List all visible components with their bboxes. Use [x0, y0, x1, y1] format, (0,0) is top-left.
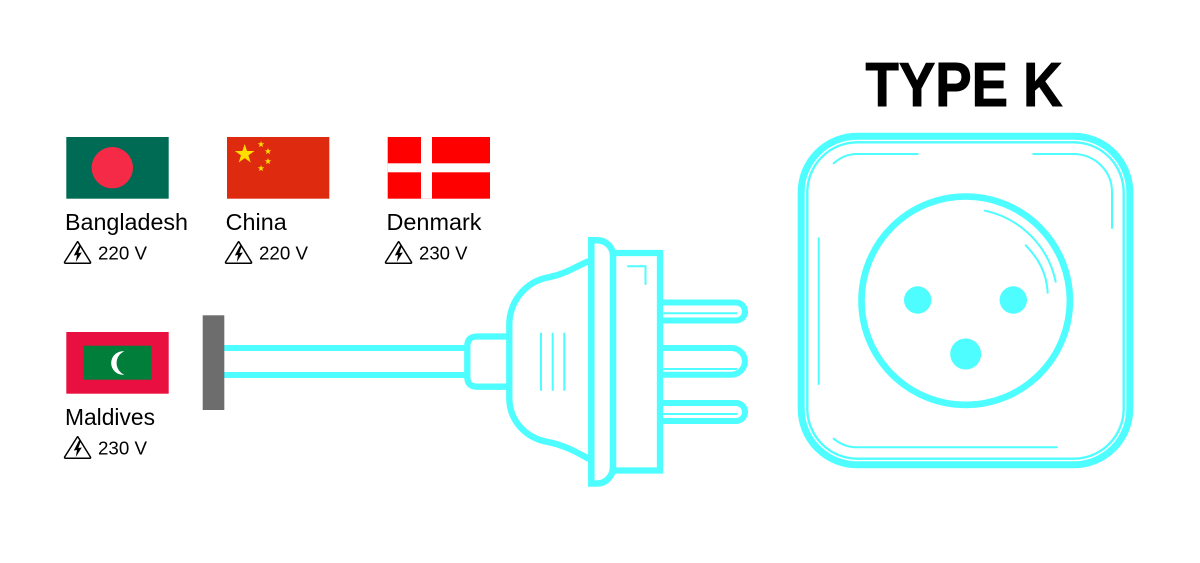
socket face — [862, 197, 1070, 405]
icon: voltage warning — [226, 242, 252, 263]
plug body — [613, 253, 660, 470]
voltage: Bangladesh: 220 V — [98, 244, 147, 264]
plug pins — [660, 302, 745, 421]
plug grip lines — [541, 333, 564, 391]
label: China: China — [226, 209, 287, 235]
panel: China — [226, 137, 329, 264]
voltage: Denmark: 230 V — [419, 244, 468, 264]
panel: Bangladesh — [65, 137, 188, 264]
icon: voltage warning — [386, 242, 412, 263]
panel: Denmark — [386, 137, 490, 264]
flag: Maldives — [66, 332, 169, 394]
socket highlights — [819, 154, 1112, 447]
plug head — [509, 261, 589, 459]
flag: Denmark — [388, 137, 490, 199]
flag: China — [227, 137, 329, 199]
plug flange — [591, 240, 613, 484]
socket inner frame — [807, 142, 1124, 459]
plug — [467, 240, 745, 484]
plug neck — [467, 336, 510, 387]
socket — [801, 136, 1130, 465]
voltage: Maldives: 230 V — [98, 438, 147, 458]
socket outer frame — [801, 136, 1130, 465]
flag: Bangladesh — [66, 137, 169, 199]
icon: voltage warning — [65, 437, 91, 458]
cord end cap — [203, 315, 224, 410]
socket face highlights — [985, 211, 1056, 293]
voltage: China: 220 V — [259, 244, 308, 264]
socket holes — [904, 286, 1027, 370]
cord — [203, 315, 468, 410]
label: Denmark: Denmark — [386, 209, 482, 235]
title: TYPE K — [866, 51, 1063, 120]
label: Maldives: Maldives — [65, 404, 155, 430]
panel: Maldives — [65, 332, 169, 458]
label: Bangladesh: Bangladesh — [65, 209, 188, 235]
plug highlight — [628, 266, 646, 284]
icon: voltage warning — [65, 242, 91, 263]
